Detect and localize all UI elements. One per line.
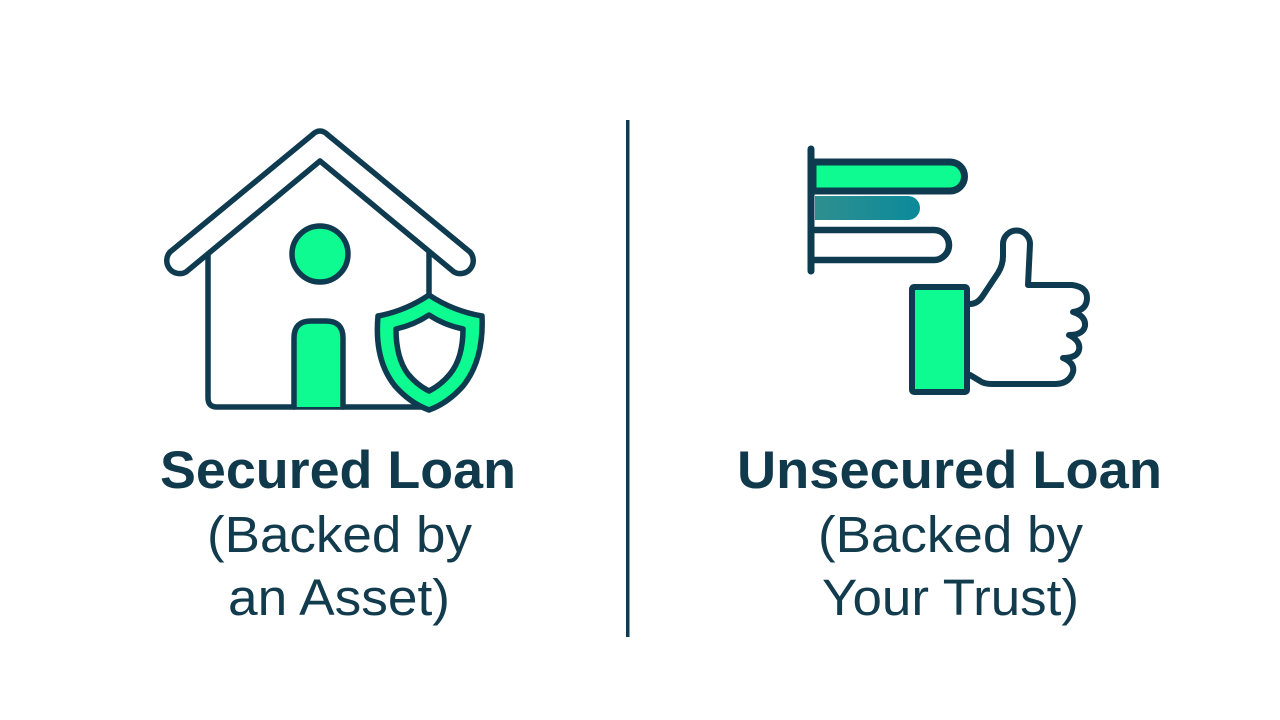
house round window (292, 226, 348, 282)
subtext: Backed by an Asset: (Backed by (207, 506, 473, 563)
icon: house with shield (167, 131, 482, 410)
shield (377, 295, 482, 410)
bar chart axis (808, 149, 814, 271)
subtext: Backed by Your Trust: Your Trust) (822, 569, 1079, 626)
subtext: Backed by Your Trust (818, 506, 1084, 626)
heading: Unsecured Loan: Unsecured Loan (737, 441, 1162, 500)
thumb cuff (912, 287, 967, 392)
subtext: Backed by an Asset: an Asset) (228, 569, 450, 626)
bar: green (813, 162, 964, 191)
subtext: Backed by Your Trust: (Backed by (818, 506, 1084, 563)
thumb and fist (970, 230, 1087, 384)
icon: bars and thumbs up (811, 149, 1087, 392)
bar: empty (813, 230, 949, 260)
divider (626, 120, 630, 637)
house walls (208, 253, 430, 407)
heading: Secured Loan: Secured Loan (160, 441, 516, 500)
house door (294, 321, 343, 407)
shield inner (396, 315, 463, 391)
bar: teal (815, 196, 920, 220)
bar chart (811, 149, 964, 271)
house roof (167, 131, 473, 274)
shield outer (377, 295, 482, 410)
thumbs up (912, 230, 1087, 392)
subtext: Backed by an Asset (207, 506, 473, 626)
